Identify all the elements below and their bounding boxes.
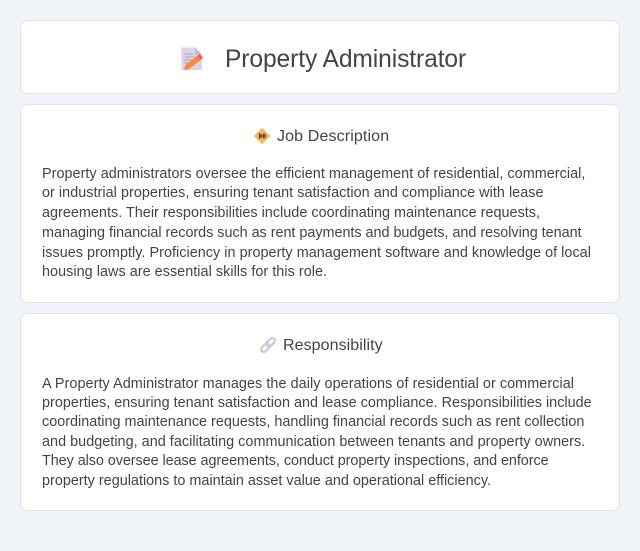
responsibility text: properties, ensuring tenant satisfaction and lease compliance. Responsibilities include <box>42 395 592 411</box>
description text: agreements. Their responsibilities include coordinating maintenance requests, <box>42 205 540 221</box>
panel: job description <box>20 104 620 303</box>
icon: chain link <box>260 337 276 353</box>
panel: responsibility <box>20 313 620 511</box>
title: Property Administrator <box>225 46 466 73</box>
description text: managing financial records such as rent payments and budgets, and resolving tenant <box>42 225 582 241</box>
description text: issues promptly. Proficiency in property management software and knowledge of local <box>42 245 591 261</box>
responsibility text: property regulations to maintain asset value and operational efficiency. <box>42 473 491 489</box>
responsibility text <box>42 376 592 489</box>
heading: job description: Job Description <box>277 128 389 145</box>
description text: Property administrators oversee the efficient management of residential, commercial, <box>42 166 585 182</box>
icon: orange diamond sign <box>254 128 270 144</box>
responsibility text: A Property Administrator manages the daily operations of residential or commercial <box>42 376 574 392</box>
description text <box>42 166 591 280</box>
icon: document with pencil <box>182 48 203 70</box>
responsibility text: and budgeting, and facilitating communication between tenants and property owners. <box>42 434 585 450</box>
panel: title card <box>20 20 620 94</box>
responsibility text: They also oversee lease agreements, conduct property inspections, and enforce <box>42 453 549 469</box>
description text: housing laws are essential skills for this role. <box>42 264 327 280</box>
responsibility text: coordinating maintenance requests, handling financial records such as rent collection <box>42 414 584 430</box>
heading: responsibility: Responsibility <box>283 337 383 354</box>
description text: or industrial properties, ensuring tenant satisfaction and compliance with lease <box>42 185 544 201</box>
